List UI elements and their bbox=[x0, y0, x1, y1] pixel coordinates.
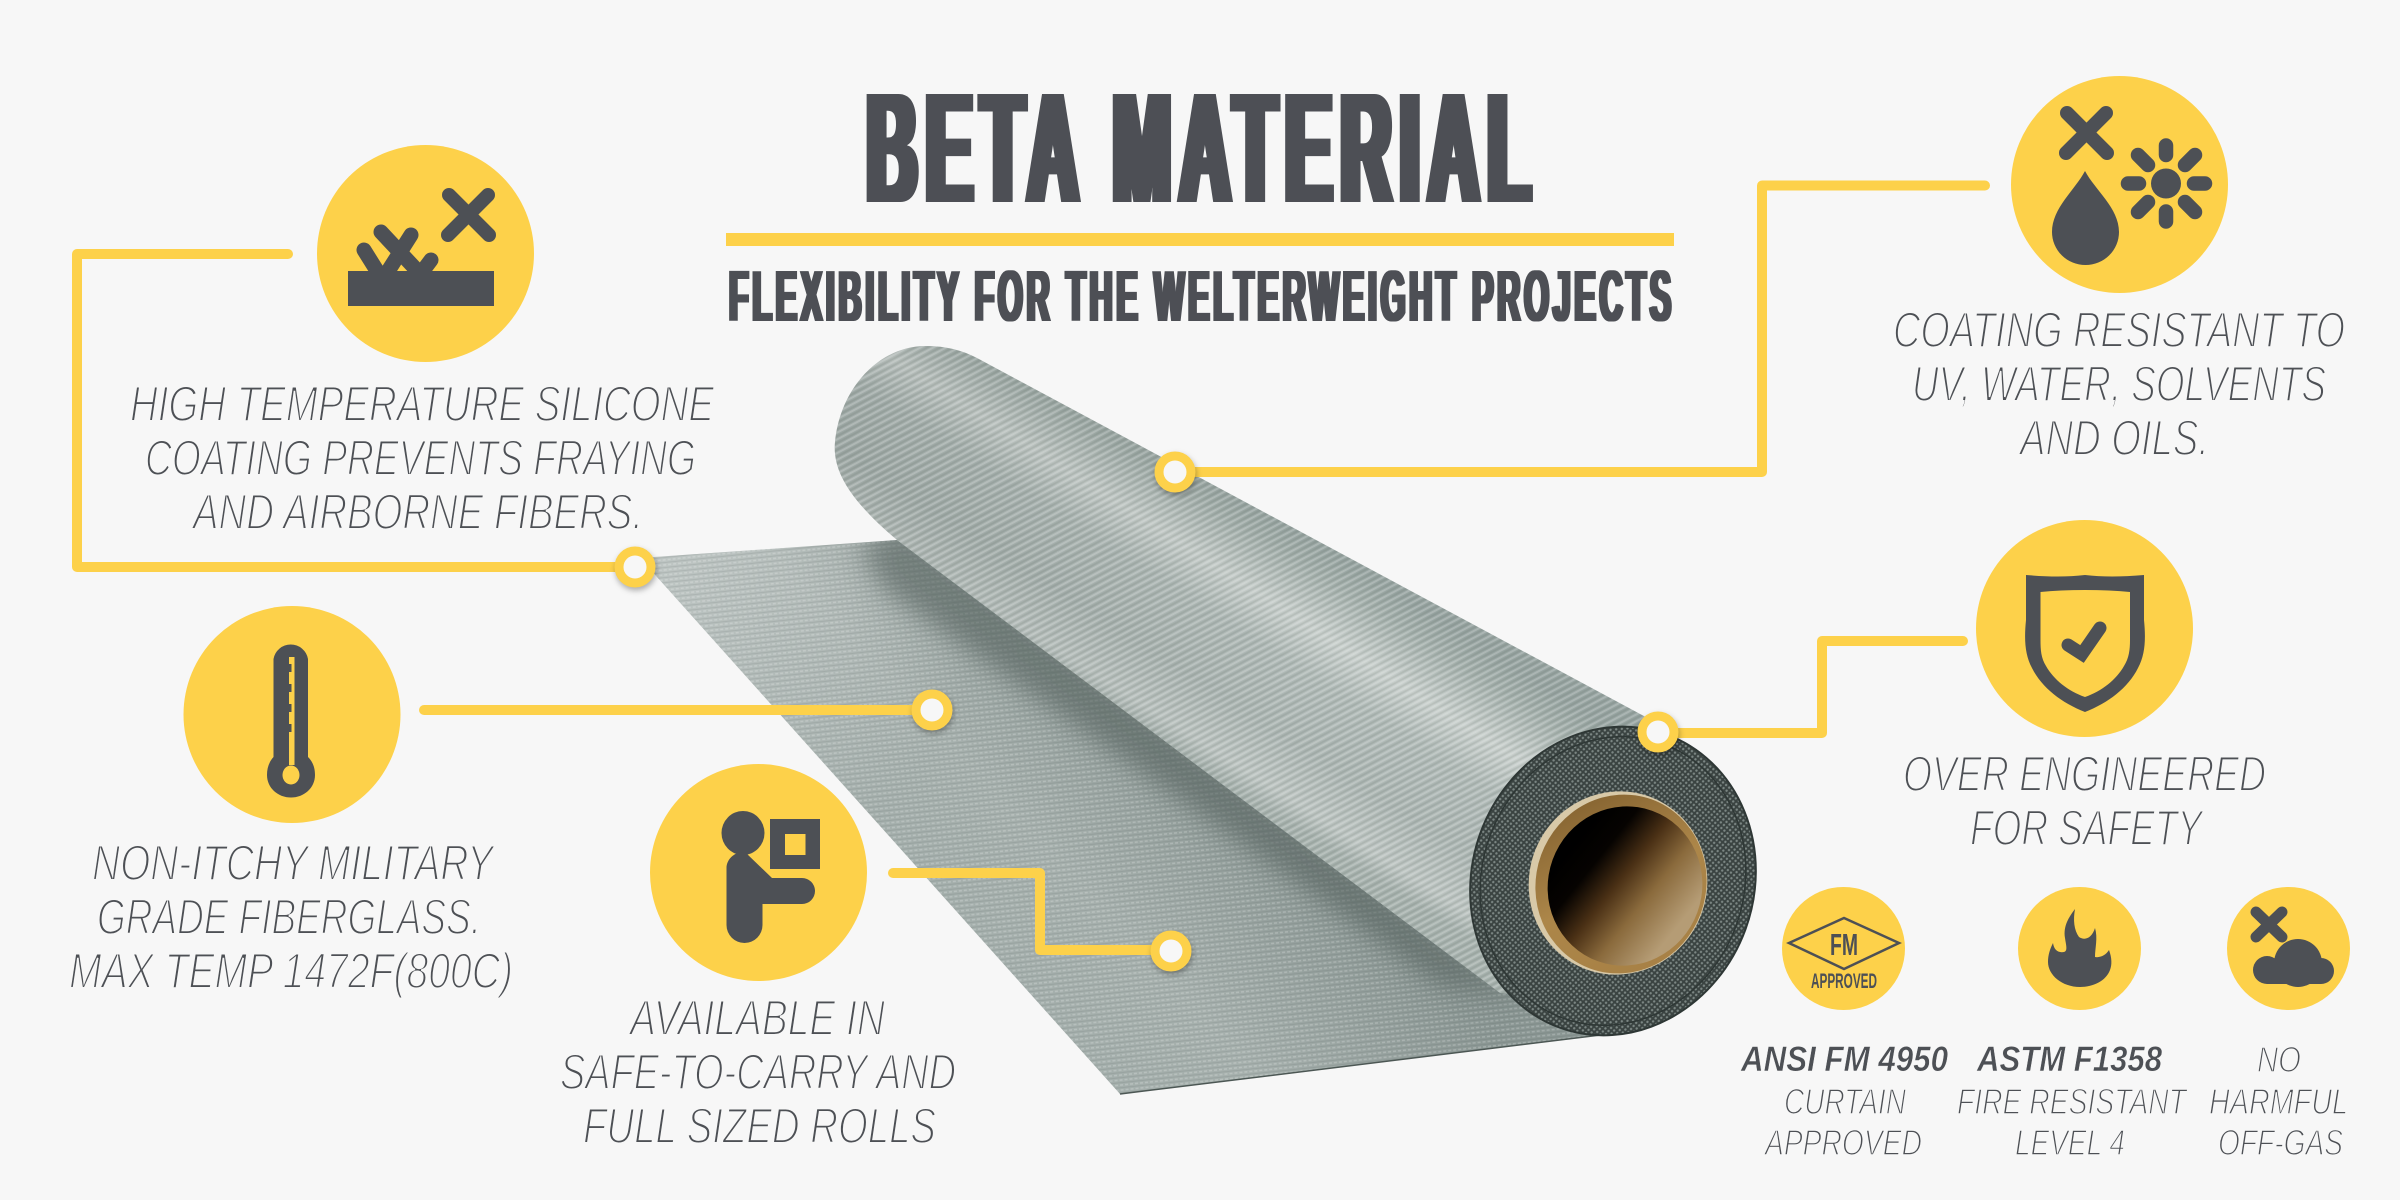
text: available rolls: AVAILABLE IN bbox=[628, 990, 886, 1046]
text: ANSI FM 4950 bbox=[1740, 1040, 1948, 1163]
text: ASTM F1358 bbox=[1957, 1040, 2188, 1163]
icon: fraying fibers bbox=[317, 145, 534, 362]
text: coating resistance bbox=[1893, 302, 2345, 466]
text: silicone coating: AND AIRBORNE FIBERS. bbox=[191, 484, 643, 540]
unrolled sheet bbox=[640, 525, 1617, 1094]
text: available rolls bbox=[560, 990, 956, 1154]
text: safety: OVER ENGINEERED bbox=[1903, 746, 2266, 802]
text: no off-gas: OFF-GAS bbox=[2218, 1122, 2343, 1163]
title: BETA MATERIAL bbox=[867, 60, 1530, 236]
icon: water and uv resistance bbox=[2011, 76, 2228, 293]
text: fiberglass: MAX TEMP 1472F(800C) bbox=[69, 943, 513, 999]
fiberglass material roll bbox=[640, 346, 1799, 1094]
subtitle: FLEXIBILITY FOR THE WELTERWEIGHT PROJECTS bbox=[729, 255, 1671, 337]
text: coating resistance: AND OILS. bbox=[2018, 410, 2209, 466]
title rule bbox=[726, 233, 1674, 246]
text: ANSI FM 4950: ANSI FM 4950 bbox=[1740, 1040, 1948, 1079]
text: safety bbox=[1903, 746, 2266, 856]
callout connector: coating resistance bbox=[1159, 186, 1985, 488]
icon: FM approved bbox=[1782, 887, 1905, 1010]
callout connector: fiberglass bbox=[424, 694, 948, 726]
text: available rolls: FULL SIZED ROLLS bbox=[583, 1098, 936, 1154]
callout connector: rolls bbox=[893, 873, 1187, 967]
callout connector: silicone coating bbox=[77, 254, 651, 583]
icon: FM approved: APPROVED bbox=[1811, 970, 1877, 993]
roll end face bbox=[1427, 686, 1799, 1076]
cardboard core bbox=[1503, 766, 1733, 1000]
text: fiberglass: NON-ITCHY MILITARY bbox=[92, 835, 496, 891]
text: silicone coating bbox=[130, 376, 714, 540]
text: silicone coating: COATING PREVENTS FRAYING bbox=[145, 430, 696, 486]
text: safety: FOR SAFETY bbox=[1970, 800, 2205, 856]
text: no off-gas: NO bbox=[2257, 1039, 2301, 1080]
text: no off-gas bbox=[2209, 1039, 2348, 1163]
icon: shield with check bbox=[1976, 520, 2193, 737]
icon: thermometer bbox=[184, 606, 400, 823]
text: ASTM F1358: FIRE RESISTANT bbox=[1957, 1081, 2188, 1122]
text: available rolls: SAFE-TO-CARRY AND bbox=[560, 1044, 956, 1100]
icon: person carrying box bbox=[650, 764, 867, 981]
text: silicone coating: HIGH TEMPERATURE SILICONE bbox=[130, 376, 714, 432]
text: fiberglass: GRADE FIBERGLASS. bbox=[97, 889, 481, 945]
icon: no harmful gas cloud bbox=[2227, 887, 2350, 1010]
icon: flame bbox=[2018, 887, 2141, 1010]
text: ASTM F1358: LEVEL 4 bbox=[2015, 1122, 2125, 1163]
text: ANSI FM 4950: APPROVED bbox=[1763, 1122, 1922, 1163]
text: no off-gas: HARMFUL bbox=[2209, 1081, 2348, 1122]
text: fiberglass bbox=[69, 835, 513, 999]
callout connector: safety bbox=[1642, 641, 1963, 748]
icon: FM approved: FM bbox=[1830, 927, 1858, 962]
text: ASTM F1358: ASTM F1358 bbox=[1976, 1040, 2162, 1079]
roll body bbox=[835, 346, 1655, 1000]
text: ANSI FM 4950: CURTAIN bbox=[1784, 1081, 1906, 1122]
